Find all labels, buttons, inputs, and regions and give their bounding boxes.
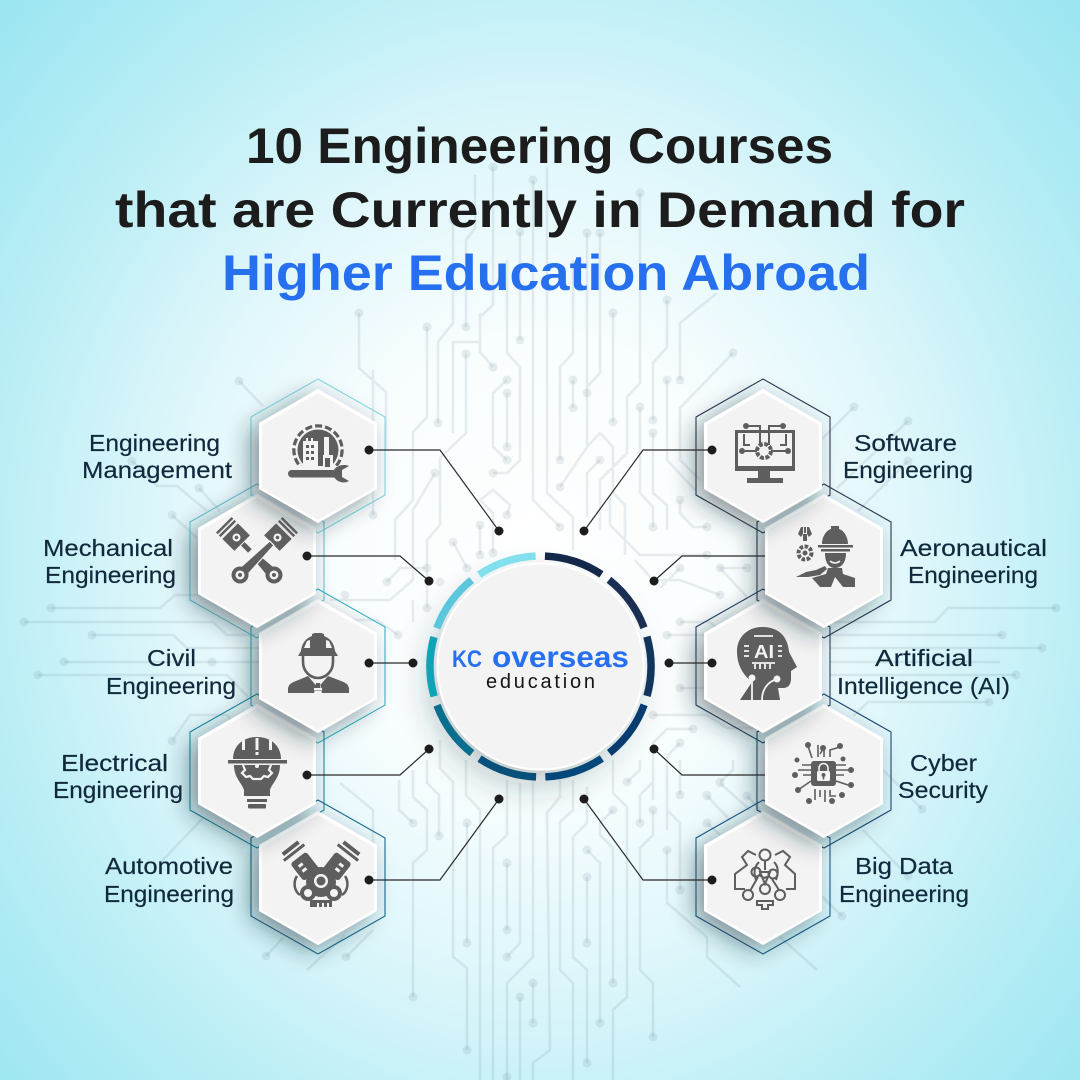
label: Automotive Engineering: Automotive — [105, 853, 233, 879]
central circle — [438, 564, 644, 770]
label: Cyber Security — [898, 750, 989, 803]
hexagon: automotive — [259, 811, 377, 945]
label: Software Engineering — [843, 430, 973, 483]
title: Higher Education Abroad — [222, 245, 870, 301]
label: Electrical Engineering — [53, 750, 183, 803]
hexagon outlines — [190, 379, 891, 954]
hexagon: big data — [704, 811, 822, 945]
hexagon: mechanical — [198, 494, 316, 628]
logo: education — [486, 671, 595, 693]
icon: AI head — [737, 627, 797, 700]
connector lines behind hexagons on right — [654, 556, 770, 775]
label: Cyber Security: Security — [898, 777, 989, 803]
icon: aeronautical engineer — [796, 526, 855, 587]
icon: factory gear and wrench — [288, 426, 349, 482]
label: Engineering Management: Management — [82, 457, 233, 483]
label: Big Data Engineering: Engineering — [839, 881, 969, 907]
icon: engine — [279, 839, 363, 907]
label: Aeronautical Engineering: Aeronautical — [900, 535, 1047, 561]
label: Cyber Security: Cyber — [910, 750, 977, 776]
icon: civil engineer — [288, 633, 349, 693]
hexagon: software — [704, 389, 822, 523]
label: Mechanical Engineering — [43, 535, 176, 588]
label: Aeronautical Engineering: Engineering — [908, 562, 1038, 588]
label: Big Data Engineering: Big Data — [855, 853, 953, 879]
label: Artificial Intelligence: Intelligence (AI) — [837, 673, 1010, 699]
label: Artificial Intelligence: Artificial — [875, 645, 973, 671]
label: Software Engineering: Engineering — [843, 457, 973, 483]
icon: AI head: AI — [754, 642, 774, 662]
label: Mechanical Engineering: Engineering — [45, 562, 176, 588]
icon: big data network gear — [735, 850, 795, 909]
hexagon: civil — [259, 599, 377, 733]
segmented ring — [385, 511, 696, 822]
icon: helmet light bulb — [228, 737, 287, 808]
label: Mechanical Engineering: Mechanical — [43, 535, 173, 561]
label: Electrical Engineering: Engineering — [53, 777, 183, 803]
hexagon: aeronautical — [765, 494, 883, 628]
title: 10 Engineering Courses — [246, 118, 833, 174]
logo — [452, 641, 629, 693]
hexagon: electrical — [198, 704, 316, 838]
label: Civil Engineering — [106, 645, 236, 699]
logo: overseas — [492, 641, 629, 674]
title: that are Currently in Demand for — [115, 182, 965, 238]
label: Aeronautical Engineering — [900, 535, 1047, 588]
label: Civil Engineering: Civil — [147, 645, 196, 671]
logo: KC — [452, 646, 482, 673]
label: Automotive Engineering: Engineering — [104, 881, 234, 907]
label: Civil Engineering: Engineering — [106, 673, 236, 699]
title — [115, 118, 965, 301]
icon: software monitor — [735, 423, 795, 483]
hexagon: cyber security — [765, 704, 883, 838]
hexagon: engineering management — [259, 389, 377, 523]
connector lines and dots — [307, 450, 712, 880]
label: Automotive Engineering — [104, 853, 234, 907]
label: Artificial Intelligence — [837, 645, 1010, 699]
label: Electrical Engineering: Electrical — [61, 750, 168, 776]
label: Big Data Engineering — [839, 853, 969, 907]
icon: cyber security chip — [792, 742, 854, 804]
label: Engineering Management: Engineering — [89, 430, 220, 456]
label: Software Engineering: Software — [854, 430, 957, 456]
hexagon: artificial intelligence — [704, 599, 822, 733]
icon: crossed pistons — [216, 517, 298, 589]
label: Engineering Management — [82, 430, 233, 483]
